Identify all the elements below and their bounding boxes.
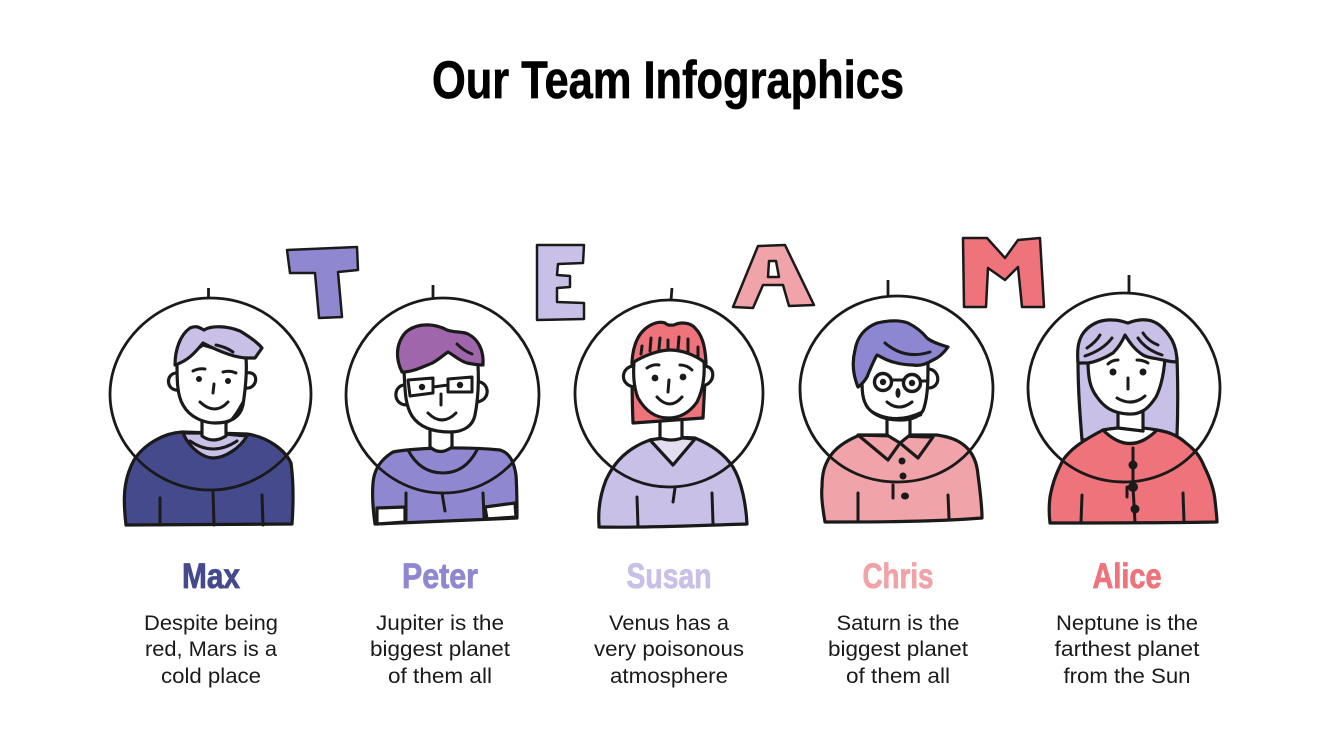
Max body (124, 432, 293, 525)
Chris hair strand (885, 343, 930, 355)
description: Chris: biggest planet (828, 638, 968, 661)
Max bubble (110, 288, 311, 490)
Susan v-neck (650, 438, 695, 465)
Peter glasses (408, 377, 472, 396)
letter A (733, 245, 814, 308)
Alice head (1088, 335, 1165, 414)
Peter hair strand (457, 344, 472, 354)
Max collar (183, 433, 247, 458)
Peter face (419, 382, 463, 420)
column: Max (144, 557, 278, 688)
Max jaw shadow (226, 395, 245, 424)
name: Susan: Susan (626, 557, 712, 596)
Susan body lines (637, 488, 713, 527)
Chris body (822, 435, 982, 522)
Peter ears (396, 382, 487, 405)
Peter collar (408, 450, 477, 473)
description: Alice (1054, 612, 1200, 688)
Chris bubble (800, 280, 993, 482)
description: Chris: Saturn is the (836, 612, 960, 635)
column: Chris (828, 557, 968, 688)
description: Max: cold place (161, 665, 261, 688)
Alice hair strands (1085, 333, 1162, 356)
description: Susan: very poisonous (594, 638, 744, 661)
description: Alice: from the Sun (1064, 665, 1190, 688)
Susan face (647, 365, 692, 404)
description: Max: red, Mars is a (145, 638, 277, 661)
letter E (537, 245, 584, 320)
person: Max (110, 288, 311, 525)
person: Alice (1028, 275, 1220, 523)
Chris ear (928, 369, 938, 388)
Max hair strand (216, 345, 233, 352)
Chris neck (887, 416, 910, 443)
Alice bubble (1028, 275, 1220, 482)
column: Alice (1054, 557, 1200, 688)
Peter shirt lines (406, 493, 484, 520)
Chris glasses (874, 374, 928, 392)
Susan neck (660, 415, 682, 440)
description: Chris: of them all (846, 665, 950, 688)
name: Peter: Peter (402, 557, 478, 596)
Alice buttons (1127, 448, 1140, 522)
Susan ears (623, 366, 713, 387)
description: Alice: Neptune is the (1056, 612, 1198, 635)
description: Alice: farthest planet (1054, 638, 1200, 661)
Max head (177, 345, 246, 423)
Susan bubble (575, 288, 763, 487)
Alice sleeve lines (1081, 493, 1184, 522)
description: Susan (594, 612, 744, 688)
Max hair (175, 327, 262, 365)
column: Peter (370, 557, 510, 688)
Chris collar (858, 435, 933, 460)
description: Susan: Venus has a (609, 612, 729, 635)
Max neck (202, 420, 226, 440)
person: Susan (575, 288, 763, 527)
name: Chris: Chris (862, 557, 934, 596)
Peter head (404, 352, 478, 432)
Susan head (634, 350, 704, 418)
Chris head (862, 345, 928, 420)
name: Alice: Alice (1092, 557, 1162, 596)
Chris face (887, 388, 912, 407)
description: Peter: biggest planet (370, 638, 510, 661)
description: Peter: of them all (388, 665, 492, 688)
description: Peter: Jupiter is the (376, 612, 504, 635)
description: Max (144, 612, 278, 688)
Alice neck (1118, 410, 1143, 431)
Susan body (599, 437, 747, 527)
Peter hair (397, 325, 483, 372)
Peter bubble (346, 285, 539, 493)
Peter body (373, 448, 517, 524)
description: Peter (370, 612, 510, 688)
letter M (963, 238, 1044, 307)
description: Max: Despite being (144, 612, 278, 635)
Chris hair (853, 321, 948, 387)
title: Our Team Infographics (432, 51, 904, 110)
Susan fringe (641, 337, 698, 356)
Alice hair top (1078, 320, 1177, 363)
letter T (287, 247, 358, 318)
Alice face (1108, 360, 1148, 402)
Peter right cuff (485, 503, 516, 519)
Peter neck (430, 428, 452, 452)
Max ears (168, 373, 256, 390)
name: Max: Max (182, 557, 240, 596)
Chris sleeve lines (858, 493, 949, 520)
Alice hair back (1078, 358, 1178, 440)
Chris buttons (893, 458, 909, 500)
description: Chris (828, 612, 968, 688)
Max collar inner fold (190, 441, 237, 449)
column: Susan (594, 557, 744, 688)
person: Chris (800, 280, 993, 522)
Alice body (1049, 430, 1217, 523)
Chris jaw shadow (872, 410, 923, 421)
Peter left cuff (377, 507, 405, 524)
Susan hair (632, 322, 706, 423)
Max face (193, 369, 236, 409)
Alice neckline (1103, 428, 1157, 444)
Max sleeve lines (160, 492, 263, 525)
person: Peter (346, 285, 539, 524)
description: Susan: atmosphere (610, 665, 728, 688)
